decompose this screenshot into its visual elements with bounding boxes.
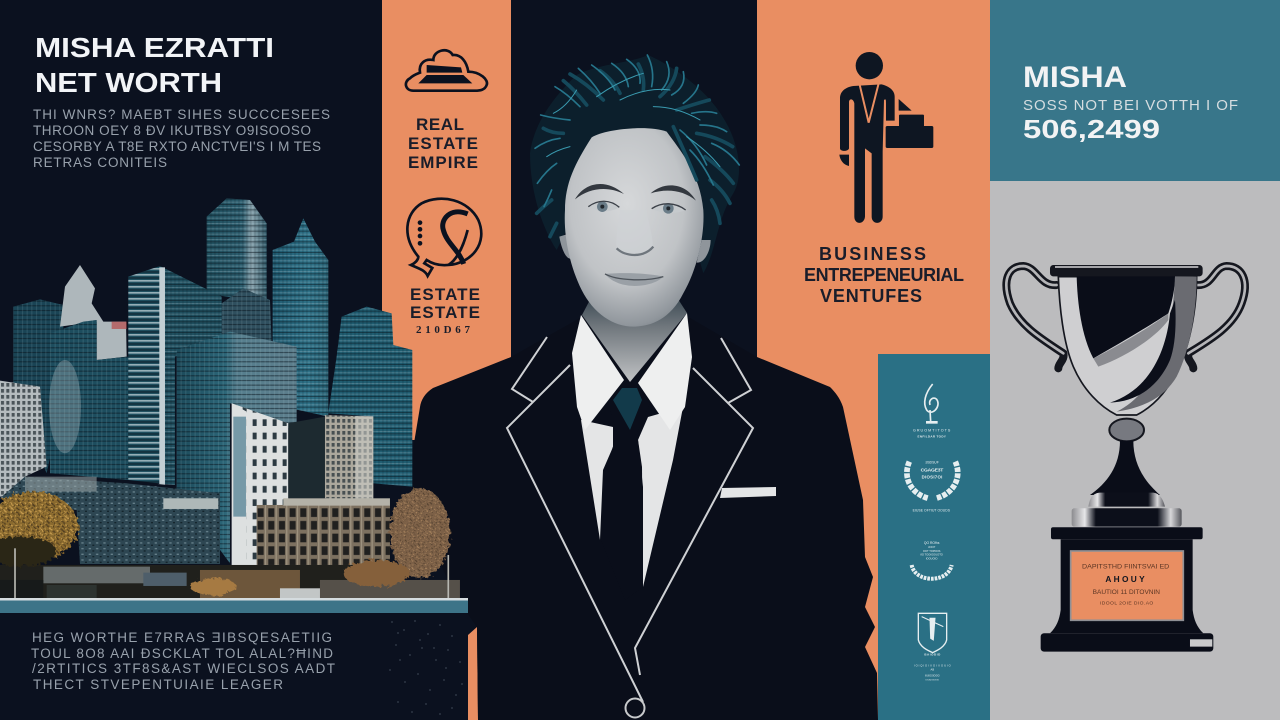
lamp posts: [15, 548, 448, 598]
white hotel tower: [232, 403, 288, 565]
trophy plaque: DAPITSTHD FIINTSVAI ED: [1082, 564, 1170, 571]
award: shield crest: IOIQIOIIIOIIIOUIO: [914, 664, 951, 668]
intro text block: CESORBY A T8E RXTO ANCTVEI'S I M TES: [33, 139, 321, 154]
award: shield crest: IIIUIOOIOOIO: [925, 676, 940, 678]
closing text block: /2RTITICS 3TF8S&AST WIECLSOS AADT: [32, 661, 335, 676]
award: shield crest: BAIODID: [924, 653, 941, 657]
mouth: [605, 273, 663, 286]
panel: gray trophy background: [990, 181, 1280, 720]
net worth name: MISHA: [1023, 61, 1127, 94]
panel: teal net worth box: [990, 0, 1280, 181]
estate label: [410, 285, 480, 336]
award: script emblem: GRUOMTITOTS: [913, 428, 951, 432]
stepped dome: [222, 288, 272, 343]
panel: right orange column: [757, 0, 990, 720]
award: wreath arc: IOOUOIO: [926, 556, 937, 560]
intro text block: THI WNRS? MAEBT SIHES SUCCCESEES: [33, 107, 330, 122]
city skyline illustration: [0, 198, 460, 599]
central tall tower: [207, 198, 267, 303]
eyebrows: [575, 184, 696, 201]
panel: left orange column: [382, 0, 511, 440]
business label: VENTUFES: [820, 286, 922, 306]
trophy rim: [1050, 265, 1203, 276]
neck: [582, 296, 687, 382]
eyes: [588, 201, 686, 214]
trophy plaque: AHOUY: [1105, 574, 1145, 584]
far left tower: [13, 299, 63, 473]
left white block: [0, 381, 47, 497]
teal mid tower: [50, 320, 128, 480]
award: laurel wreath: [907, 460, 958, 513]
center tower: [177, 332, 297, 563]
award: wreath arc: fIO TOOIOOUOTO: [920, 553, 943, 557]
closing text block: TOUL 8O8 AAI ÐSCKLAT TOL ALAL?ĦIND: [31, 646, 333, 661]
award: shield crest: [914, 613, 951, 682]
estate label: 210D67: [416, 324, 470, 336]
dark mid block: [288, 417, 325, 498]
icon: businessman with briefcase: [839, 52, 933, 223]
low podium: [0, 477, 220, 564]
title: MISHA EZRATTI: [35, 32, 274, 63]
award: laurel wreath: ƎSDSUF: [925, 460, 939, 464]
award: script emblem: ENFILDAR TODY: [917, 435, 946, 439]
beige tower: [325, 415, 373, 502]
real estate empire label: EMPIRE: [408, 153, 478, 172]
award: wreath arc: QO ROfhs: [924, 541, 940, 545]
trophy plaque: IDOOL 2OIE DIO.AO: [1100, 601, 1153, 607]
real estate empire label: REAL: [416, 115, 464, 134]
intro text block: THROON OEY 8 ÐV IKUTBSY O9ISOOSO: [33, 123, 311, 138]
spire tower: [273, 218, 328, 417]
icon: real estate building mound: [406, 50, 487, 91]
trophy stem: [1090, 441, 1160, 495]
church tower: [60, 265, 127, 360]
title: [35, 32, 274, 98]
icon: speech bubble monogram: [407, 199, 481, 276]
trophy bowl: [1058, 277, 1197, 415]
orange sliver: [468, 627, 478, 720]
suit jacket: [410, 318, 878, 720]
figure: man in suit: [410, 55, 878, 720]
real estate empire label: ESTATE: [408, 134, 478, 153]
pocket square: [720, 487, 776, 498]
award: wreath arc: OOT TOPDOS: [923, 549, 941, 553]
shirt: [581, 407, 683, 587]
award: wreath arc: [912, 541, 952, 579]
award: wreath arc: UOIOT: [928, 547, 936, 549]
intro text block: [33, 107, 330, 170]
hair strands: [535, 55, 739, 237]
trophy pedestal: [1050, 539, 1203, 633]
right cluster tower: [328, 307, 412, 487]
trophy plaque: BAUTIOI 11 DITOVNIN: [1093, 590, 1160, 596]
business label: BUSINESS: [819, 244, 926, 264]
wide striped tower: [128, 266, 222, 485]
business label: ENTREPENEURIAL: [804, 265, 964, 285]
award: laurel wreath: EIUSE OFTIUT OOUDS: [913, 509, 951, 513]
trophy knob: [1109, 419, 1144, 441]
lapels: [507, 337, 753, 702]
award: shield crest: IOOIUOIIOOIO: [926, 680, 940, 682]
award: laurel wreath: DIOSI7OI: [922, 475, 942, 480]
estate label: ESTATE: [410, 303, 480, 322]
net worth figure: 506,2499: [1023, 114, 1160, 144]
collar: [572, 313, 692, 430]
closing text block: HEG WORTHE E7RRAS ƎIBSQESAETIIG: [32, 630, 332, 645]
trophy tiers: [1088, 493, 1165, 507]
closing text block: [31, 630, 335, 692]
intro text block: RETRAS CONITEIS: [33, 155, 167, 170]
head: [530, 55, 739, 327]
title: NET WORTH: [35, 67, 222, 98]
trophy: [1006, 265, 1245, 652]
estate label: ESTATE: [410, 285, 480, 304]
trees: [0, 488, 450, 595]
trophy handles: [1006, 266, 1245, 368]
face: [565, 128, 704, 327]
panel: teal awards column: [878, 354, 990, 720]
jacket button: [626, 698, 644, 718]
brown block: [257, 505, 390, 565]
ears: [559, 233, 711, 263]
trophy plaque: [1071, 551, 1183, 620]
business label: [804, 244, 964, 306]
real estate empire label: [408, 115, 478, 172]
award: laurel wreath: CGAGE3T: [921, 467, 943, 473]
starry speckle: [389, 620, 463, 715]
hair mass: [530, 55, 739, 273]
closing text block: THECT STVEPENTUIAIE LEAGER: [33, 677, 283, 692]
award: shield crest: AB: [931, 668, 934, 672]
tie: [601, 387, 650, 600]
teal ledge: [0, 598, 468, 613]
awards column icons: [907, 384, 958, 682]
waterfront ground: [0, 565, 390, 599]
net worth caption: SOSS NOT BEI VOTTH I OF: [1023, 97, 1238, 114]
award: script emblem: [913, 384, 951, 439]
nose: [616, 210, 653, 256]
